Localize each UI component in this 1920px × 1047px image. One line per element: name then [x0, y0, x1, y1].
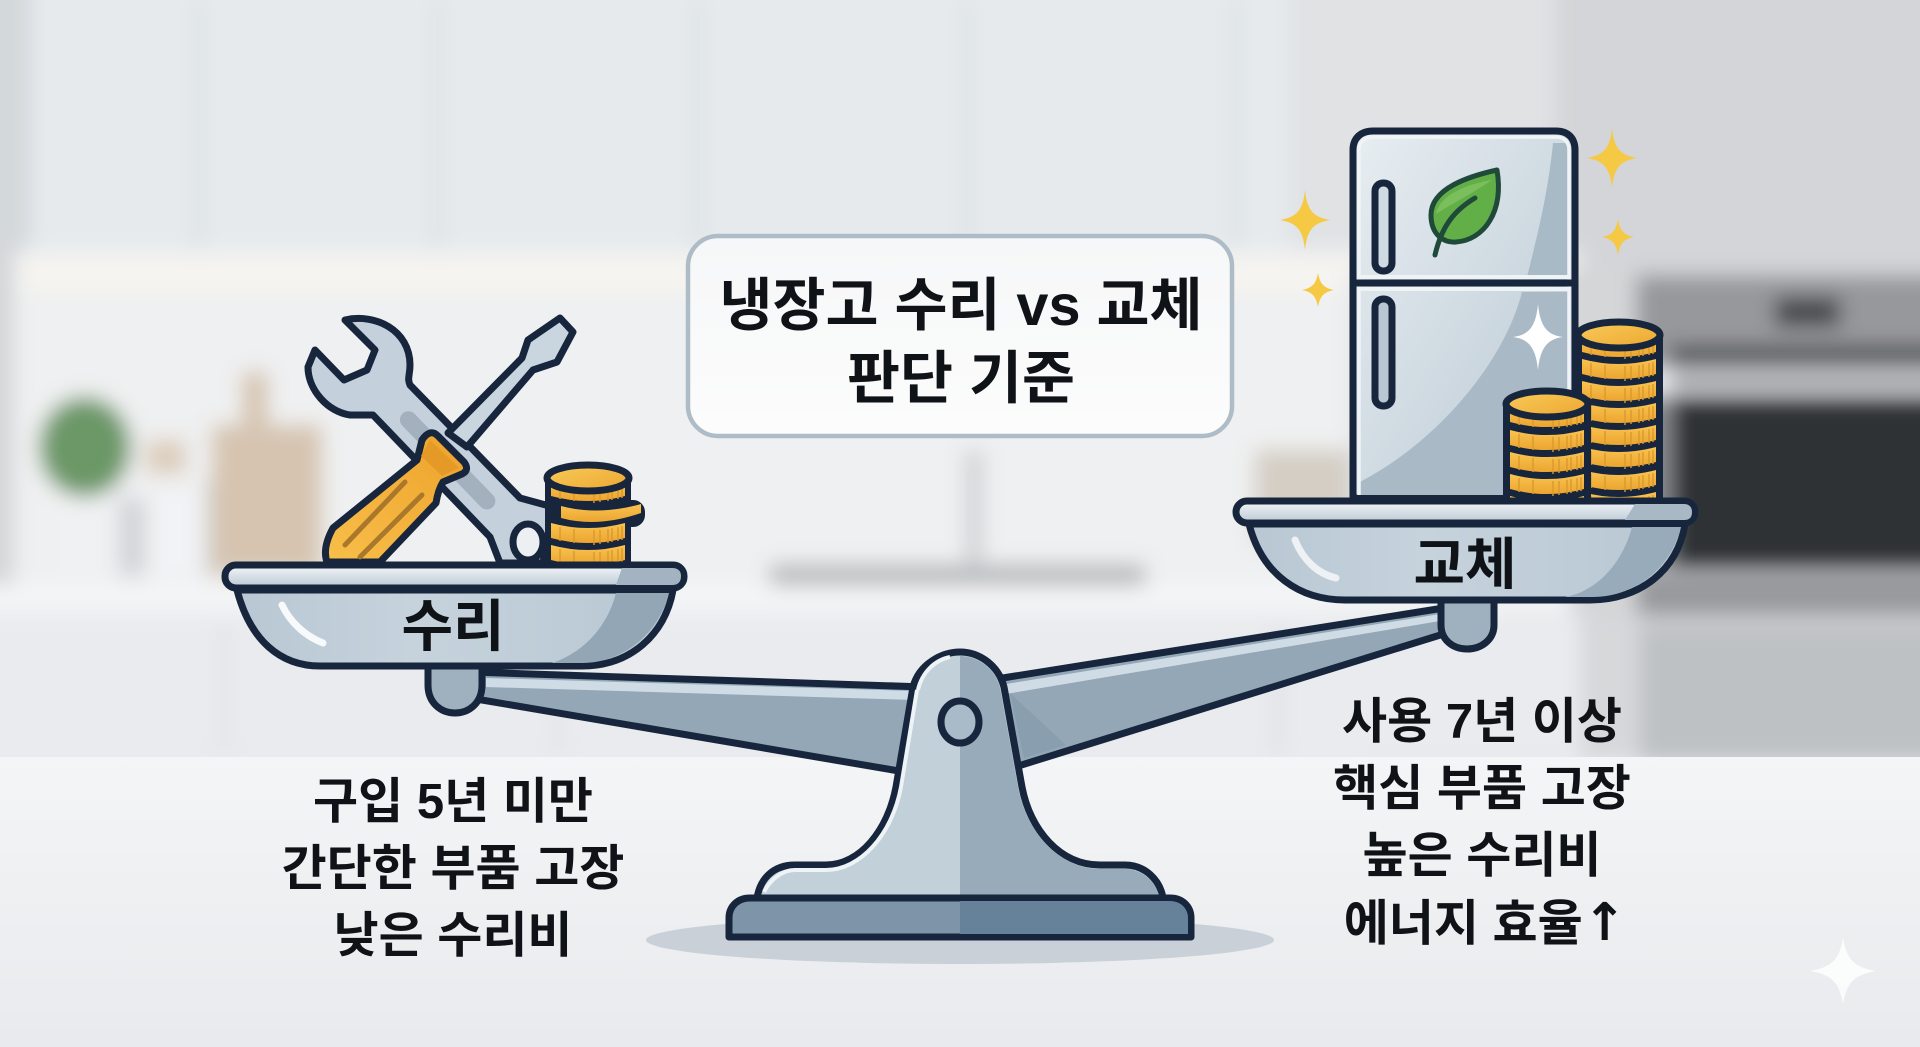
replace criteria text: 높은 수리비 [1362, 829, 1602, 883]
beam: right arm [990, 607, 1450, 767]
right pan bowl [1249, 524, 1685, 600]
left pan post [428, 660, 482, 713]
label: replace: 교체 [1413, 533, 1517, 596]
title line 1: 냉장고 수리 vs 교체 [720, 274, 1202, 338]
refrigerator [1353, 131, 1575, 498]
beam: left arm [470, 672, 925, 772]
repair criteria text: 구입 5년 미만 [313, 775, 593, 829]
right pan post [1441, 595, 1494, 649]
left pan: repair [225, 318, 684, 713]
screwdriver [325, 318, 573, 562]
icon: leaf [1431, 170, 1498, 255]
shadow under scale [646, 916, 1274, 964]
right pan: replace [1236, 128, 1695, 649]
tall coin stack [1575, 322, 1663, 514]
left pan rim [225, 565, 684, 588]
wrench [308, 318, 553, 563]
stand body [757, 652, 1163, 898]
stand pivot [941, 701, 979, 743]
stand base [729, 898, 1191, 937]
replace criteria text: 사용 7년 이상 [1342, 695, 1622, 749]
fulcrum stand [729, 652, 1191, 937]
repair criteria text: 낮은 수리비 [333, 909, 573, 963]
icon: white sparkle [1513, 304, 1563, 370]
scale beam [470, 607, 1450, 772]
short coin stack [1503, 391, 1591, 518]
replace criteria text: 핵심 부품 고장 [1333, 762, 1631, 816]
repair criteria text [282, 775, 624, 963]
fridge handles [1375, 183, 1392, 271]
left pan bowl [237, 590, 673, 666]
replace criteria text [1333, 695, 1631, 953]
replace criteria text: 에너지 효율↑ [1344, 893, 1626, 953]
watermark sparkle [1810, 938, 1876, 1004]
gold sparkles [1280, 128, 1637, 307]
repair criteria text: 간단한 부품 고장 [282, 842, 624, 896]
right pan rim [1236, 501, 1695, 523]
left coin stack [545, 465, 645, 567]
label: repair: 수리 [401, 595, 505, 658]
title card [688, 236, 1232, 436]
title line 2: 판단 기준 [847, 347, 1075, 411]
